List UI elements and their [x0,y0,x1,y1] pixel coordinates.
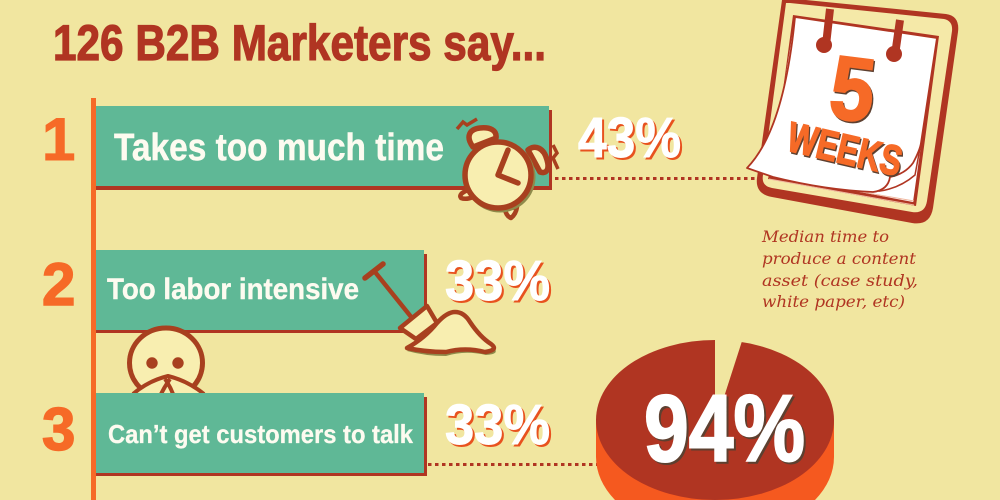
icon: calendar 5 weeks [747,0,958,223]
calendar unit: WEEKS [784,115,908,187]
rank 3: 3 [42,396,75,463]
dotted leader 3 [428,463,597,466]
calendar number: 5 [825,38,880,142]
bar 3: Can’t get customers to talk [108,419,413,449]
calendar number: 5 [826,39,882,144]
bar 2 [96,250,427,333]
percent 33 bottom: 33% [445,393,550,457]
calendar unit: WEEKS [783,113,907,185]
icon: covered-mouth face [130,328,204,400]
percent 33 bottom: 33% [447,395,552,459]
dotted leader 1 [555,177,757,180]
rank 1: 1 [42,106,75,173]
timeline axis [91,98,96,500]
pie chart 94 percent: 94% [646,378,807,484]
percent 43: 43% [578,106,681,170]
percent 33 top: 33% [445,249,550,313]
pie chart 94 percent [596,338,834,500]
calendar caption: produce a content [762,250,917,268]
percent 43: 43% [580,108,683,172]
calendar caption: asset (case study, [762,272,918,290]
icon: alarm clock [457,119,558,218]
bar 1 [96,106,552,190]
bar 1: Takes too much time [114,127,444,169]
rank 2: 2 [42,251,75,318]
percent 33 top: 33% [447,251,552,315]
calendar caption [761,228,918,311]
calendar caption: white paper, etc) [762,293,905,311]
title: 126 B2B Marketers say... [53,15,546,71]
bar 3 [96,393,427,476]
pie chart 94 percent: 94% [644,376,805,482]
icon: shovel and pile [365,264,496,356]
bar 2: Too labor intensive [107,273,359,306]
calendar caption: Median time to [761,228,889,246]
